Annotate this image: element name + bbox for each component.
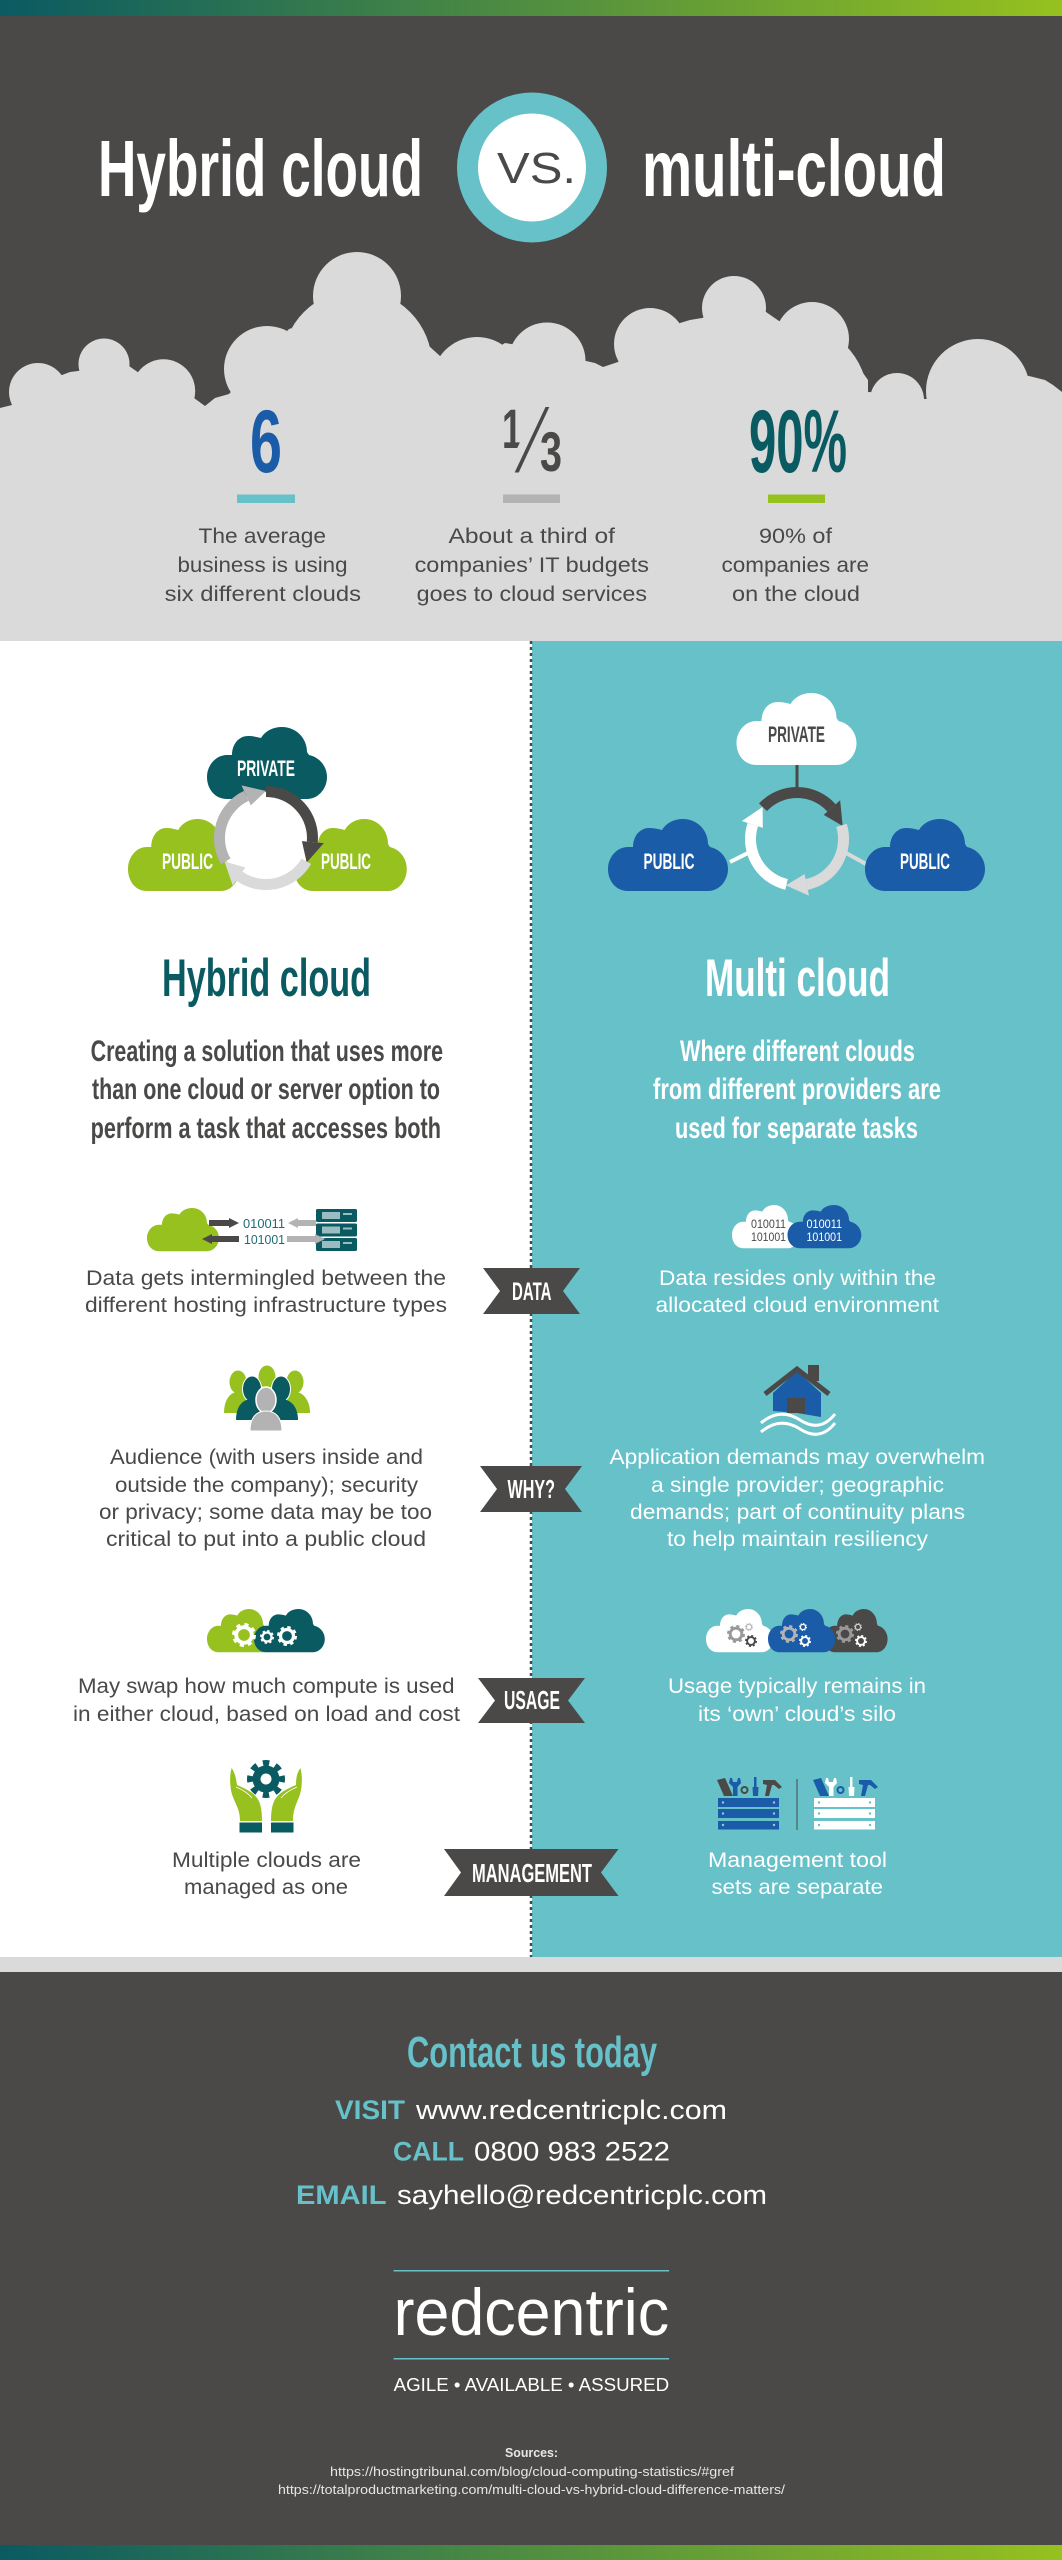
- contact details: 0800 983 2522: [474, 2136, 670, 2166]
- text: management hybrid: [172, 1849, 361, 1899]
- heading: contact us today: Contact us today: [407, 2028, 657, 2077]
- icon: clouds with shared gears: [207, 1609, 325, 1652]
- heading: hybrid cloud: Hybrid cloud: [162, 949, 371, 1008]
- description: hybrid cloud: perform a task that accesses both: [91, 1112, 441, 1145]
- text: why hybrid: critical to put into a public cloud: [106, 1528, 426, 1551]
- stat: one third: companies’ IT budgets: [415, 554, 649, 577]
- text: usage multi: Usage typically remains in: [668, 1675, 926, 1698]
- diagram: hybrid cloud: PUBLIC: [162, 849, 213, 874]
- contact details: VISIT: [335, 2095, 406, 2125]
- diagram: hybrid cloud: PUBLIC: [321, 849, 371, 874]
- title: Hybrid cloud: [98, 124, 423, 213]
- text: why multi: [610, 1446, 985, 1551]
- contact details: www.redcentricplc.com: [415, 2095, 727, 2125]
- text: data hybrid: [85, 1267, 447, 1317]
- text: data multi: [656, 1267, 939, 1317]
- icon: data exchange between cloud and server: [147, 1208, 357, 1251]
- ribbon: usage: [478, 1678, 585, 1723]
- panel: multi cloud background: [532, 641, 1062, 1957]
- icon: separate data clouds: 010011: [751, 1217, 786, 1231]
- stat: one third: goes to cloud services: [417, 583, 647, 606]
- vs badge: [457, 92, 607, 242]
- stat: one third: /: [509, 388, 556, 495]
- description: multi cloud: from different providers are: [653, 1073, 941, 1106]
- contact details: sayhello@redcentricplc.com: [397, 2180, 767, 2210]
- description: hybrid cloud: than one cloud or server option to: [92, 1073, 440, 1106]
- diagram: hybrid cloud: PRIVATE: [237, 756, 295, 781]
- text: usage multi: its ‘own’ cloud’s silo: [698, 1703, 896, 1726]
- icon: data exchange between cloud and server: 101001: [244, 1232, 285, 1247]
- description: hybrid cloud: [91, 1035, 443, 1145]
- text: data hybrid: different hosting infrastructure types: [85, 1294, 447, 1317]
- stat: six clouds: 6: [250, 391, 282, 491]
- text: why hybrid: outside the company); security: [115, 1474, 419, 1497]
- cloud band: [0, 252, 1062, 641]
- text: why multi: a single provider; geographic: [651, 1474, 944, 1497]
- heading: multi cloud: Multi cloud: [705, 949, 890, 1008]
- icon: flooded house: [761, 1365, 835, 1434]
- logo: redcentric: [394, 2270, 669, 2395]
- text: management hybrid: managed as one: [184, 1876, 348, 1899]
- ribbon: data: DATA: [512, 1278, 552, 1306]
- sources: https://hostingtribunal.com/blog/cloud-computing-statistics/#gref: [330, 2464, 734, 2479]
- text: why multi: demands; part of continuity plans: [630, 1501, 965, 1524]
- text: usage hybrid: May swap how much compute is used: [78, 1675, 454, 1698]
- text: management multi: Management tool: [708, 1849, 887, 1872]
- stat: six clouds: business is using: [178, 554, 348, 577]
- stat: ninety percent: 90%: [749, 391, 847, 491]
- stat: one third: About a third of: [448, 525, 615, 548]
- top gradient bar: [0, 0, 1062, 16]
- description: multi cloud: [653, 1035, 941, 1145]
- sources: https://totalproductmarketing.com/multi-cloud-vs-hybrid-cloud-difference-matters/: [278, 2482, 785, 2497]
- diagram: multi cloud: PUBLIC: [644, 849, 695, 874]
- diagram: multi cloud: PRIVATE: [768, 722, 825, 747]
- text: usage multi: [668, 1675, 926, 1726]
- icon: group of users: [224, 1366, 310, 1431]
- logo: redcentric: AGILE • AVAILABLE • ASSURED: [394, 2375, 669, 2395]
- ribbon: usage: USAGE: [504, 1685, 560, 1715]
- description: hybrid cloud: Creating a solution that uses more: [91, 1035, 443, 1068]
- title: multi-cloud: [642, 124, 946, 213]
- stat: one third: 3: [540, 420, 562, 483]
- ribbon: management: [444, 1849, 618, 1896]
- vs badge: VS.: [497, 144, 576, 193]
- stat: ninety percent: on the cloud: [732, 583, 860, 606]
- text: usage hybrid: [73, 1675, 460, 1726]
- icon: separate data clouds: 101001: [806, 1230, 842, 1244]
- icon: separate data clouds: [732, 1205, 861, 1248]
- bottom gradient bar: [0, 2545, 1062, 2560]
- icon: three clouds with gears: [706, 1609, 888, 1652]
- diagram: hybrid cloud: [128, 727, 407, 891]
- logo: redcentric: redcentric: [394, 2275, 669, 2349]
- stat: ninety percent: [722, 391, 869, 606]
- text: why hybrid: or privacy; some data may be too: [99, 1501, 432, 1524]
- grey strip under panels: [0, 1957, 1062, 1972]
- text: why multi: Application demands may overwhelm: [610, 1446, 985, 1469]
- text: usage hybrid: in either cloud, based on load and cost: [73, 1703, 460, 1726]
- text: data hybrid: Data gets intermingled between the: [86, 1267, 446, 1290]
- stat: six clouds: [165, 391, 361, 606]
- contact details: [296, 2095, 767, 2210]
- sources: [278, 2445, 785, 2497]
- text: management multi: sets are separate: [712, 1876, 883, 1899]
- text: data multi: allocated cloud environment: [656, 1294, 939, 1317]
- icon: separate data clouds: 010011: [806, 1217, 842, 1231]
- text: data multi: Data resides only within the: [659, 1267, 936, 1290]
- contact details: EMAIL: [296, 2180, 386, 2210]
- stat: one third: 1: [502, 397, 522, 460]
- stat: ninety percent: companies are: [722, 554, 869, 577]
- ribbon: why: WHY?: [508, 1474, 555, 1504]
- panel: hybrid cloud background: [0, 641, 532, 1957]
- icon: hands holding gear: [230, 1760, 302, 1832]
- diagram: multi cloud: [608, 693, 985, 905]
- contact details: CALL: [393, 2136, 464, 2166]
- text: management multi: [708, 1849, 887, 1899]
- title: [98, 124, 946, 213]
- stat: six clouds: six different clouds: [165, 583, 361, 606]
- stat: six clouds: The average: [198, 525, 326, 548]
- description: multi cloud: used for separate tasks: [675, 1112, 918, 1145]
- text: management hybrid: Multiple clouds are: [172, 1849, 361, 1872]
- ribbon: why: [480, 1466, 582, 1512]
- text: why hybrid: [99, 1446, 432, 1551]
- diagram: multi cloud: PUBLIC: [900, 849, 950, 874]
- icon: two separate toolboxes: [717, 1777, 878, 1830]
- icon: separate data clouds: 101001: [751, 1230, 786, 1244]
- stat: ninety percent: 90% of: [759, 525, 832, 548]
- sources: Sources:: [505, 2445, 558, 2460]
- icon: data exchange between cloud and server: 010011: [243, 1216, 285, 1231]
- stat: one third: [415, 388, 649, 606]
- text: why hybrid: Audience (with users inside and: [110, 1446, 423, 1469]
- ribbon: management: MANAGEMENT: [472, 1858, 592, 1888]
- text: why multi: to help maintain resiliency: [667, 1528, 929, 1551]
- ribbon: data: [483, 1268, 580, 1314]
- description: multi cloud: Where different clouds: [680, 1035, 915, 1068]
